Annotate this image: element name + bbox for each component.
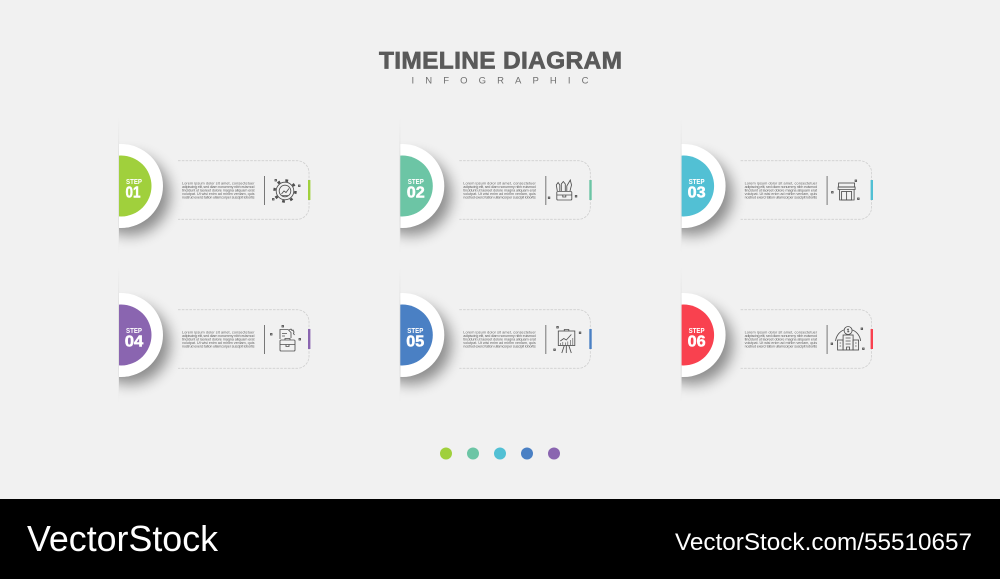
step 03 text: volutpat. Ut wisi enim ad minim veniam, quis	[745, 192, 817, 196]
step 05 text: volutpat. Ut wisi enim ad minim veniam, quis	[463, 341, 536, 345]
step 06 text: adipiscing elit, sed diam nonummy nibh euismod	[745, 334, 817, 338]
step 03 label: 03	[688, 184, 706, 201]
step 04 text: nostrud exerci tation ullamcorper suscipit lobortis	[182, 344, 255, 348]
step 03 dashed box	[741, 161, 872, 219]
step 03 text: tincidunt ut laoreet dolore magna aliquam erat	[745, 188, 818, 192]
step 05 card	[400, 289, 592, 393]
step 05 dashed box	[459, 310, 590, 368]
step 02 label: STEP	[408, 179, 424, 186]
step 04 text: volutpat. Ut wisi enim ad minim veniam, quis	[182, 341, 255, 345]
icon: storefront	[832, 180, 859, 200]
step 06 dashed box	[741, 310, 872, 368]
step 03 text: Lorem ipsum dolor sit amet, consectetuer	[745, 182, 818, 186]
step 06 text: volutpat. Ut wisi enim ad minim veniam, quis	[745, 341, 817, 345]
step 06 accent bar	[871, 329, 873, 349]
step 04 card	[118, 289, 310, 393]
legend dots	[440, 448, 560, 460]
step 04 text: tincidunt ut laoreet dolore magna aliquam erat	[182, 338, 255, 342]
step 05 label: 05	[406, 333, 424, 350]
footer url text: VectorStock.com/55510657	[675, 529, 972, 556]
title: TIMELINE DIAGRAM	[379, 48, 622, 74]
step 04 dashed box	[178, 310, 309, 368]
step 03 text: adipiscing elit, sed diam nonummy nibh euismod	[745, 185, 817, 189]
step 02 text: Lorem ipsum dolor sit amet, consectetuer	[463, 182, 537, 186]
step 05 label: STEP	[407, 328, 424, 335]
step 06 label: 06	[688, 333, 706, 350]
footer bar	[0, 499, 1000, 579]
step 04 label: 04	[125, 333, 143, 350]
step 05 text: nostrud exerci tation ullamcorper suscipit lobortis	[463, 344, 536, 348]
step 05 accent bar	[589, 329, 592, 349]
subtitle: INFOGRAPHIC	[412, 76, 589, 86]
step 01 text: Lorem ipsum dolor sit amet, consectetuer	[182, 182, 255, 186]
step 04 accent bar	[308, 329, 310, 349]
step 03 label: STEP	[689, 179, 705, 186]
step 06 text: nostrud exerci tation ullamcorper suscipit lobortis	[745, 344, 817, 348]
icon: gear with chart	[272, 180, 300, 202]
step 05 text: Lorem ipsum dolor sit amet, consectetuer	[463, 330, 537, 334]
step 06 text: Lorem ipsum dolor sit amet, consectetuer	[745, 330, 818, 334]
step 05 text: tincidunt ut laoreet dolore magna aliquam erat	[463, 338, 537, 342]
step 01 card	[118, 140, 310, 244]
icon: briefcase with growth arrows	[548, 180, 577, 200]
step 04 label: STEP	[126, 328, 142, 335]
step 01 text	[182, 182, 255, 200]
icon: briefcase with documents	[270, 326, 300, 351]
step 06 card	[680, 289, 873, 393]
step 02 accent bar	[589, 180, 592, 200]
step 04 text	[182, 330, 255, 348]
step 02 card	[400, 140, 592, 244]
footer logo text: VectorStock	[27, 518, 219, 559]
icon: presentation board with chart	[554, 326, 581, 353]
step 06 text	[745, 330, 818, 348]
step 03 card	[680, 140, 873, 244]
step 04 text: adipiscing elit, sed diam nonummy nibh euismod	[182, 334, 254, 338]
step 03 text	[745, 182, 818, 200]
step 02 text: volutpat. Ut wisi enim ad minim veniam, quis	[463, 192, 536, 196]
step 05 text	[463, 330, 537, 348]
step 02 label: 02	[407, 184, 425, 201]
step 01 dashed box	[178, 161, 309, 219]
step 03 accent bar	[871, 180, 873, 200]
step 01 label: 01	[126, 184, 141, 201]
step 01 accent bar	[308, 180, 310, 200]
step 01 text: nostrud exerci tation ullamcorper suscipit lobortis	[182, 196, 255, 200]
step 01 text: tincidunt ut laoreet dolore magna aliquam erat	[182, 188, 255, 192]
step 03 text: nostrud exerci tation ullamcorper suscipit lobortis	[745, 196, 817, 200]
step 02 text	[463, 182, 537, 200]
step 02 text: nostrud exerci tation ullamcorper suscipit lobortis	[463, 196, 536, 200]
step 02 text: adipiscing elit, sed diam nonummy nibh euismod	[463, 185, 536, 189]
step 06 label: STEP	[689, 328, 705, 335]
step 01 label: STEP	[126, 179, 142, 186]
step 01 text: volutpat. Ut wisi enim ad minim veniam, quis	[182, 192, 255, 196]
step 02 text: tincidunt ut laoreet dolore magna aliquam erat	[463, 188, 537, 192]
step 06 text: tincidunt ut laoreet dolore magna aliquam erat	[745, 338, 818, 342]
step 02 dashed box	[459, 161, 590, 219]
step 04 text: Lorem ipsum dolor sit amet, consectetuer	[182, 330, 255, 334]
icon: bank building with coin	[831, 326, 864, 350]
step 05 text: adipiscing elit, sed diam nonummy nibh euismod	[463, 334, 536, 338]
step 01 text: adipiscing elit, sed diam nonummy nibh euismod	[182, 185, 254, 189]
